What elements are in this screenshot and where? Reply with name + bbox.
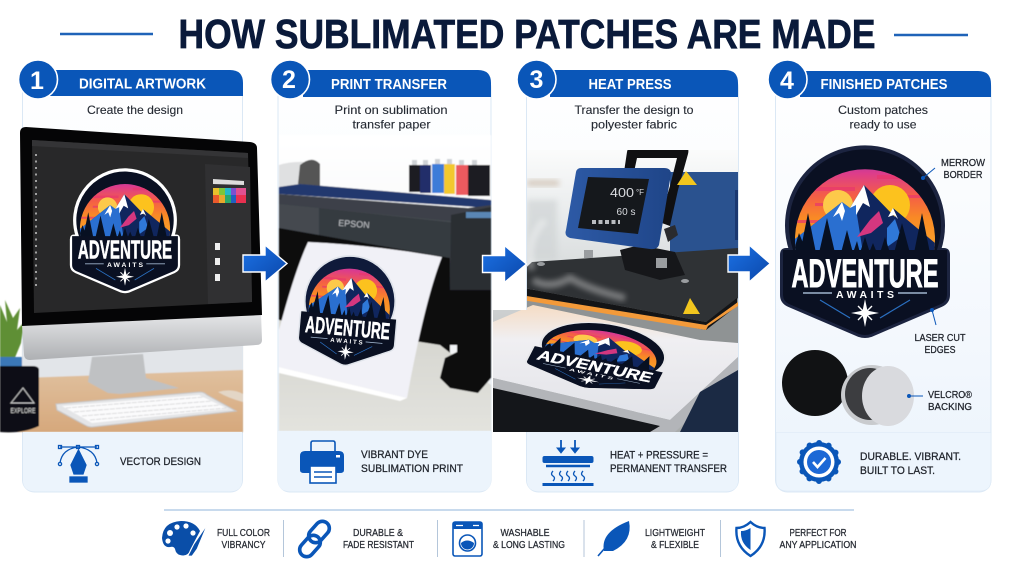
header bar 4 bbox=[800, 71, 991, 97]
icon: shield bbox=[736, 522, 765, 556]
printer photo: EPSON bbox=[338, 218, 370, 230]
logo on screen bbox=[71, 170, 179, 292]
laser cut callout: LASER CUT bbox=[914, 332, 966, 344]
heat press photo: 400 bbox=[610, 185, 634, 200]
panel 1 card bbox=[22, 76, 242, 492]
icon: feather bbox=[598, 521, 630, 556]
heading 1: DIGITAL ARTWORK bbox=[79, 76, 206, 92]
washable label: & LONG LASTING bbox=[493, 540, 565, 551]
panel: step 2 print transfer bbox=[270, 60, 491, 492]
number badge 3: 3 bbox=[530, 66, 543, 94]
logo on fabric bbox=[519, 312, 681, 401]
logo on fabric: AWAITS bbox=[568, 368, 615, 381]
icon: heat and pressure bbox=[542, 440, 594, 486]
merrow border callout: MERROW bbox=[941, 157, 985, 169]
caption 2: transfer paper bbox=[352, 118, 430, 132]
arrow 1 bbox=[243, 245, 287, 282]
heat press photo: °F bbox=[636, 188, 644, 197]
washable label bbox=[493, 528, 565, 551]
full color label bbox=[217, 528, 270, 551]
heading 3: HEAT PRESS bbox=[588, 77, 672, 93]
header bar 2 bbox=[303, 70, 491, 97]
merrow border callout bbox=[921, 157, 985, 181]
laser cut callout: EDGES bbox=[924, 344, 956, 356]
monitor bbox=[20, 127, 262, 360]
durable label bbox=[343, 528, 414, 551]
panel 4 card bbox=[776, 76, 991, 492]
caption 4: ready to use bbox=[850, 118, 917, 132]
heading 4: FINISHED PATCHES bbox=[820, 77, 948, 93]
logo on transfer paper: ADVENTURE bbox=[304, 311, 391, 344]
logo on screen: ADVENTURE bbox=[78, 237, 172, 265]
caption 3 bbox=[574, 103, 694, 132]
vibrant dye label: VIBRANT DYE bbox=[361, 449, 428, 461]
lightweight label: LIGHTWEIGHT bbox=[645, 528, 705, 539]
footer strip 2 bbox=[278, 431, 491, 491]
application label: ANY APPLICATION bbox=[780, 540, 856, 551]
icon: printer bbox=[300, 441, 344, 483]
velcro backing discs bbox=[782, 350, 914, 426]
panel: step 4 finished patches bbox=[768, 60, 991, 492]
panel: step 3 heat press bbox=[493, 60, 738, 492]
benefit: application bbox=[736, 522, 856, 556]
benefit: durable bbox=[297, 518, 414, 560]
heat press photo: 60 s bbox=[617, 207, 635, 218]
printer photo bbox=[279, 135, 491, 431]
full color label: VIBRANCY bbox=[222, 540, 266, 551]
icon: palette bbox=[162, 521, 207, 556]
title: HOW SUBLIMATED PATCHES ARE MADE bbox=[178, 11, 876, 57]
icon: chain link bbox=[297, 518, 332, 560]
footer strip 3 bbox=[527, 432, 738, 491]
durable label: FADE RESISTANT bbox=[343, 540, 414, 551]
icon: pen tool bbox=[58, 446, 99, 482]
logo on transfer paper: AWAITS bbox=[330, 337, 363, 347]
application label bbox=[780, 528, 856, 551]
application label: PERFECT FOR bbox=[790, 528, 846, 539]
caption 3: polyester fabric bbox=[591, 118, 677, 132]
durable label bbox=[860, 451, 961, 477]
velcro callout: VELCRO® bbox=[928, 389, 972, 401]
number badge 4 bbox=[768, 60, 807, 99]
desk photo bbox=[0, 300, 243, 432]
number badge 2 bbox=[270, 60, 310, 99]
woven patch: AWAITS bbox=[836, 289, 894, 301]
number badge 4: 4 bbox=[780, 67, 794, 95]
panel 3 card bbox=[526, 76, 738, 492]
arrow 3 bbox=[728, 245, 770, 282]
benefit: washable bbox=[453, 522, 565, 556]
icon: verified badge bbox=[799, 442, 839, 482]
woven patch bbox=[782, 147, 948, 336]
panel 2 card bbox=[278, 76, 491, 492]
footer strip 1 bbox=[23, 432, 242, 491]
heat and pressure label bbox=[610, 450, 727, 475]
durable label: DURABLE & bbox=[353, 528, 403, 539]
header bar 1 bbox=[50, 70, 243, 96]
merrow border callout: BORDER bbox=[944, 169, 983, 181]
vibrant dye label: SUBLIMATION PRINT bbox=[361, 463, 463, 475]
footer strip 4 bbox=[776, 432, 991, 491]
full color label: FULL COLOR bbox=[217, 528, 270, 539]
logo on fabric: ADVENTURE bbox=[534, 348, 655, 386]
vibrant dye label bbox=[361, 449, 463, 475]
header bar 3 bbox=[550, 70, 738, 97]
heading 2: PRINT TRANSFER bbox=[331, 77, 447, 93]
caption 4 bbox=[838, 103, 928, 132]
heat press photo bbox=[493, 135, 738, 432]
benefit: full color bbox=[162, 521, 270, 556]
number badge 1 bbox=[18, 60, 58, 99]
heat and pressure label: HEAT + PRESSURE = bbox=[610, 450, 708, 462]
panel: step 1 digital artwork bbox=[0, 60, 262, 492]
caption 2: Print on sublimation bbox=[334, 103, 448, 117]
lightweight label bbox=[645, 528, 705, 551]
lightweight label: & FLEXIBLE bbox=[651, 540, 699, 551]
vector design label: VECTOR DESIGN bbox=[120, 456, 201, 468]
durable label: DURABLE. VIBRANT. bbox=[860, 451, 961, 463]
arrow 2 bbox=[482, 246, 526, 282]
number badge 2: 2 bbox=[282, 66, 296, 94]
icon: washing machine bbox=[453, 522, 482, 556]
laser cut callout bbox=[914, 308, 966, 356]
number badge 1: 1 bbox=[30, 67, 44, 95]
logo on transfer paper bbox=[296, 252, 402, 369]
caption 4: Custom patches bbox=[838, 103, 928, 117]
logo on screen: AWAITS bbox=[107, 262, 144, 269]
benefit: lightweight bbox=[598, 521, 705, 556]
desk photo: EXPLORE bbox=[10, 406, 36, 415]
velcro callout: BACKING bbox=[928, 401, 972, 413]
velcro callout bbox=[907, 389, 972, 413]
heat and pressure label: PERMANENT TRANSFER bbox=[610, 463, 727, 475]
benefits row bbox=[162, 510, 856, 560]
washable label: WASHABLE bbox=[500, 528, 550, 539]
number badge 3 bbox=[517, 60, 556, 99]
caption 1: Create the design bbox=[87, 103, 183, 117]
caption 3: Transfer the design to bbox=[574, 103, 694, 117]
caption 2 bbox=[334, 103, 448, 132]
durable label: BUILT TO LAST. bbox=[860, 465, 935, 477]
